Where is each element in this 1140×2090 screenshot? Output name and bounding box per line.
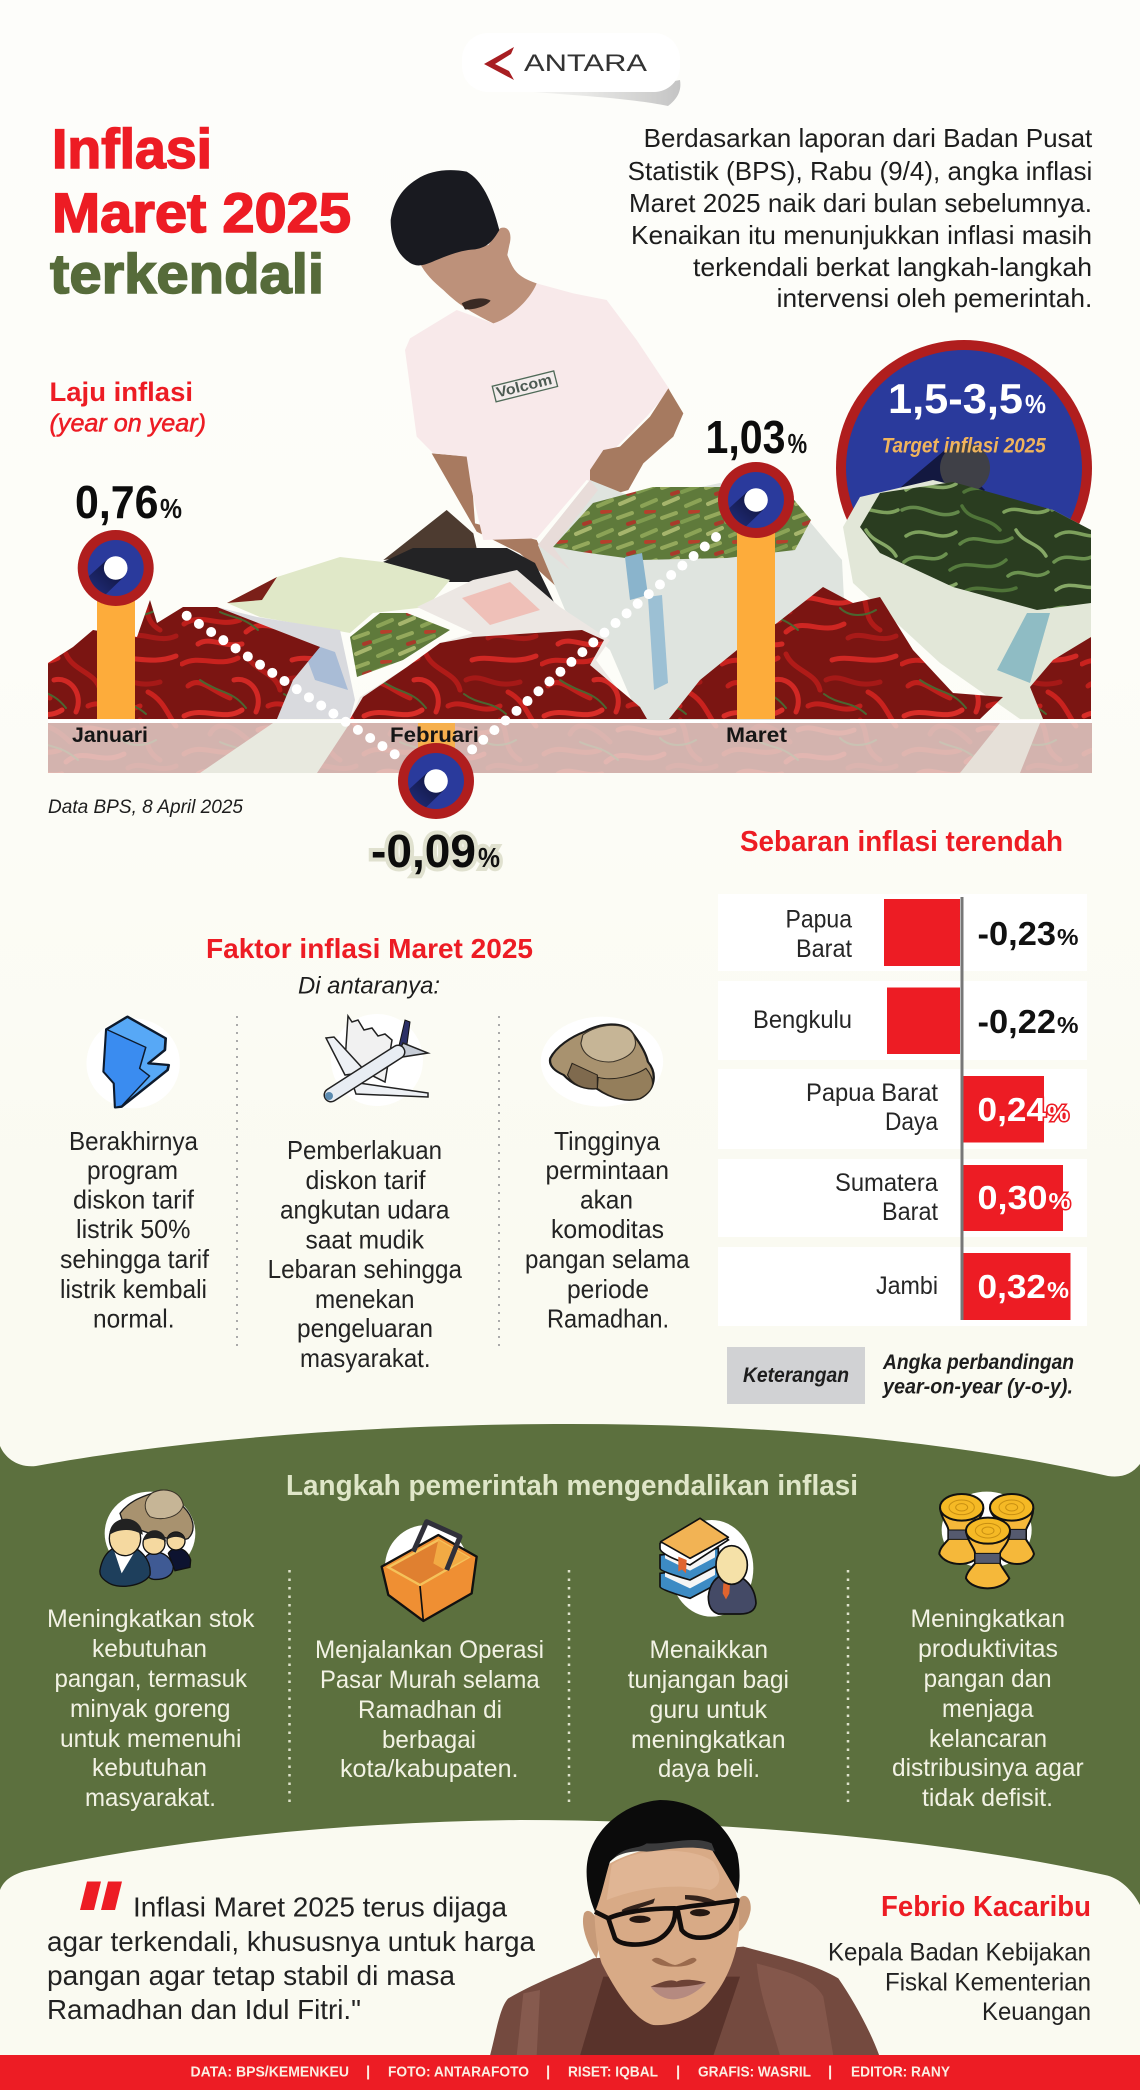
measure text: food stock: pangan, termasuk xyxy=(54,1665,247,1693)
factor text: food demand: Tingginya xyxy=(554,1126,661,1156)
speaker name and role: Kepala Badan Kebijakan xyxy=(828,1939,1091,1967)
factor text: food demand: permintaan xyxy=(546,1155,669,1185)
footer credits: | xyxy=(366,2064,370,2080)
chart subtitle xyxy=(50,377,206,438)
data source note: Data BPS, 8 April 2025 xyxy=(48,797,243,818)
photo: chili sacks xyxy=(48,480,1092,773)
measure text: food stock: minyak goreng xyxy=(70,1695,230,1723)
measure text: cheap market: Ramadhan di xyxy=(358,1696,502,1724)
month labels xyxy=(72,724,787,747)
stack: left xyxy=(939,1494,1034,1588)
legend: Keterangan xyxy=(743,1364,849,1387)
stack: front xyxy=(966,1532,1010,1588)
value: Februari: % xyxy=(478,842,500,873)
quote text xyxy=(47,1892,535,2025)
middle sack stripes xyxy=(625,553,648,600)
marker: Maret xyxy=(714,462,794,540)
green chilies in right sack xyxy=(860,482,1091,610)
measure text: food stock: kebutuhan xyxy=(92,1635,207,1663)
measure text: food productivity: tidak defisit. xyxy=(922,1784,1053,1812)
row: Bengkulu: % xyxy=(1057,1012,1078,1038)
row: Papua Barat xyxy=(718,894,1087,971)
intro paragraph xyxy=(628,123,1093,313)
row: Papua Barat Daya: Papua Barat xyxy=(806,1079,938,1107)
logo: ANTARA xyxy=(462,33,680,106)
row: Papua Barat Daya xyxy=(718,1069,1087,1149)
faded strip xyxy=(48,720,1092,773)
factor text: air fares: pengeluaran xyxy=(297,1313,433,1343)
factor text: electricity: diskon tarif xyxy=(73,1185,195,1215)
title: Inflasi xyxy=(52,117,212,180)
target inflation badge: % xyxy=(1025,389,1046,419)
right sack xyxy=(843,480,1091,719)
factor text: air fares: Pemberlakuan xyxy=(287,1135,442,1165)
measure text: food stock: kebutuhan xyxy=(92,1754,207,1782)
factor text: air fares: saat mudik xyxy=(306,1225,425,1255)
dotted trend line xyxy=(187,537,716,758)
heading: faktor inflasi: Faktor inflasi Maret 2025 xyxy=(206,933,533,964)
factor text: electricity: Berakhirnya xyxy=(69,1126,199,1156)
measure text: food productivity: menjaga xyxy=(942,1695,1034,1723)
marker: Januari xyxy=(74,530,154,608)
panel: government measures xyxy=(0,1424,1140,1905)
target inflation badge: 1,5-3,5 xyxy=(888,375,1023,422)
row: Papua Barat: -0,23 xyxy=(978,915,1056,952)
measure text: cheap market xyxy=(315,1636,544,1783)
hair xyxy=(587,1800,740,1912)
seller left arm xyxy=(432,453,560,590)
intro paragraph: Maret 2025 naik dari bulan sebelumnya. xyxy=(629,188,1092,218)
value: Januari: % xyxy=(160,493,182,524)
chart subtitle: Laju inflasi xyxy=(50,377,193,407)
intro paragraph: Statistik (BPS), Rabu (9/4), angka inflasi xyxy=(628,156,1092,186)
speaker name and role: Fiskal Kementerian xyxy=(885,1968,1091,1996)
icon: airplane and receipt xyxy=(325,1014,428,1106)
footer credits xyxy=(0,2055,1140,2090)
measure text: teacher allowance: daya beli. xyxy=(658,1755,760,1783)
factor text: electricity: listrik kembali xyxy=(60,1274,207,1304)
factor text: food demand: komoditas xyxy=(551,1214,664,1244)
right sack stripe xyxy=(997,613,1050,683)
factor text: food demand: akan xyxy=(580,1185,633,1215)
basket xyxy=(383,548,565,640)
nose xyxy=(652,1958,697,1967)
red chilies: centre pile xyxy=(669,587,1003,719)
row: Papua Barat Daya: Daya xyxy=(885,1108,938,1136)
eyes xyxy=(629,1916,651,1923)
heading: sebaran: Sebaran inflasi terendah xyxy=(740,826,1063,858)
factor text: electricity: listrik 50% xyxy=(76,1214,190,1244)
seller trousers xyxy=(383,510,477,560)
chart subtitle: (year on year) xyxy=(50,410,206,438)
measure text: cheap market: Menjalankan Operasi xyxy=(315,1636,544,1664)
measure text: teacher allowance: guru untuk xyxy=(650,1696,767,1724)
factor text: air fares: menekan xyxy=(315,1284,414,1314)
seller shirt xyxy=(405,283,670,540)
factor text: air fares: masyarakat. xyxy=(300,1343,430,1373)
red chilies: right pile xyxy=(1030,637,1091,719)
factor text: air fares: Lebaran sehingga xyxy=(268,1254,462,1284)
measure text: cheap market: berbagai xyxy=(382,1726,476,1754)
photo: market seller xyxy=(383,170,683,590)
measure text: food productivity: produktivitas xyxy=(918,1635,1058,1663)
middle sack xyxy=(538,480,850,720)
measure text: cheap market: kota/kabupaten. xyxy=(340,1755,518,1783)
row: Bengkulu: -0,22 xyxy=(978,1003,1056,1040)
seller neck and face xyxy=(420,228,537,323)
marker: Februari xyxy=(394,743,474,821)
footer credits: FOTO: ANTARAFOTO xyxy=(388,2064,529,2080)
row: Sumatera Barat: Sumatera xyxy=(835,1169,938,1197)
lips xyxy=(651,1980,706,1999)
intro paragraph: terkendali berkat langkah-langkah xyxy=(693,252,1092,282)
portrait: Febrio Kacaribu xyxy=(490,1800,879,2056)
bar: Maret xyxy=(737,530,775,719)
pale green sack xyxy=(227,557,450,633)
panel: lowest inflation bars xyxy=(718,894,1087,1326)
bar: Januari xyxy=(97,600,135,719)
ears xyxy=(583,1911,602,1958)
row: Bengkulu xyxy=(718,981,1087,1060)
quote mark xyxy=(80,1882,122,1910)
factor text: electricity xyxy=(60,1126,210,1334)
quote text: Ramadhan dan Idul Fitri." xyxy=(47,1994,361,2025)
footer credits: | xyxy=(676,2064,680,2080)
row: Sumatera Barat xyxy=(718,1159,1087,1237)
value: Maret: % xyxy=(788,428,807,459)
title xyxy=(50,117,351,305)
brows xyxy=(622,1898,655,1913)
glasses xyxy=(595,1900,737,1945)
legend: year-on-year (y-o-y). xyxy=(882,1376,1073,1399)
factor text: food demand xyxy=(525,1126,690,1334)
row: Sumatera Barat: 0,30 xyxy=(978,1179,1048,1216)
footer credits: | xyxy=(828,2064,832,2080)
title: Maret 2025 xyxy=(52,181,351,244)
factor text: food demand: Ramadhan. xyxy=(547,1304,669,1334)
icon: food sack xyxy=(541,1017,663,1107)
row: Jambi: 0,32 xyxy=(978,1268,1046,1305)
intro paragraph: Berdasarkan laporan dari Badan Pusat xyxy=(644,123,1093,153)
speaker name and role: Febrio Kacaribu xyxy=(881,1891,1091,1923)
green chilies in middle sack xyxy=(553,487,811,560)
measure text: teacher allowance: tunjangan bagi xyxy=(628,1666,789,1694)
stack: right xyxy=(990,1508,1034,1564)
measure text: teacher allowance: Menaikkan xyxy=(650,1636,768,1664)
row: Papua Barat: Papua xyxy=(786,906,852,934)
measure text: food productivity: kelancaran xyxy=(929,1725,1047,1753)
factor text: electricity: sehingga tarif xyxy=(60,1244,210,1274)
factor text: electricity: normal. xyxy=(93,1304,174,1334)
white plastic bag xyxy=(350,570,640,719)
row: Jambi: Jambi xyxy=(876,1272,938,1300)
footer credits: | xyxy=(546,2064,550,2080)
quote text: pangan agar tetap stabil di masa xyxy=(47,1960,455,1991)
measure text: food stock: Meningkatkan stok xyxy=(47,1605,255,1633)
factor text: air fares: angkutan udara xyxy=(280,1195,450,1225)
face xyxy=(595,1845,739,2025)
footer credits: EDITOR: RANY xyxy=(851,2064,950,2080)
factor text: air fares xyxy=(268,1135,462,1373)
small green chilies xyxy=(350,613,450,677)
factor text: electricity: program xyxy=(87,1155,178,1185)
footer credits: RISET: IQBAL xyxy=(568,2064,658,2080)
icon: gold coin stacks xyxy=(939,1492,1034,1588)
measure text: teacher allowance: meningkatkan xyxy=(631,1726,786,1754)
measure text: cheap market: Pasar Murah selama xyxy=(320,1666,540,1694)
speaker name and role: Keuangan xyxy=(982,1998,1091,2026)
bar: Februari xyxy=(418,723,455,753)
red chilies: February pile xyxy=(350,630,647,719)
factor text: food demand: periode xyxy=(567,1274,649,1304)
icon: electricity bolt xyxy=(86,1017,180,1108)
title: terkendali xyxy=(50,242,324,305)
row: Papua Barat Daya: % xyxy=(1047,1100,1069,1126)
intro paragraph: Kenaikan itu menunjukkan inflasi masih xyxy=(631,220,1092,250)
icon: people and sack xyxy=(100,1490,195,1586)
measure text: teacher allowance xyxy=(628,1636,789,1783)
row: Papua Barat Daya: 0,24 xyxy=(978,1091,1047,1128)
month labels: Februari xyxy=(390,724,479,747)
row: Bengkulu: Bengkulu xyxy=(753,1006,852,1034)
target inflation badge xyxy=(836,340,1092,596)
row: Jambi: % xyxy=(1047,1277,1069,1303)
icon: books and teacher xyxy=(660,1518,756,1617)
measure text: food productivity xyxy=(892,1605,1084,1812)
measure text: food stock: masyarakat. xyxy=(85,1784,216,1812)
row: Papua Barat: % xyxy=(1057,924,1078,950)
legend: Angka perbandingan xyxy=(882,1351,1074,1374)
quote text: Inflasi Maret 2025 terus dijaga xyxy=(133,1892,507,1923)
measure text: food productivity: distribusinya agar xyxy=(892,1754,1084,1782)
factor text: air fares: diskon tarif xyxy=(306,1165,426,1195)
target inflation badge: Target inflasi 2025 xyxy=(882,435,1046,458)
row: Sumatera Barat: % xyxy=(1048,1188,1070,1214)
row: Papua Barat: Barat xyxy=(796,935,852,963)
measure text: food stock: untuk memenuhi xyxy=(60,1725,242,1753)
jacket xyxy=(490,1947,879,2056)
heading: langkah pemerintah: Langkah pemerintah mengendalikan inflasi xyxy=(286,1470,858,1502)
logo: ANTARA: ANTARA xyxy=(524,50,647,77)
striped cloth sack xyxy=(217,607,355,719)
footer credits: GRAFIS: WASRIL xyxy=(698,2064,811,2080)
quote text: agar terkendali, khususnya untuk harga xyxy=(47,1926,535,1957)
month labels: Maret xyxy=(726,724,787,747)
value: Maret: 1,03 xyxy=(706,411,786,463)
legend xyxy=(727,1347,1074,1404)
sack rim xyxy=(538,480,598,570)
measure text: food stock xyxy=(47,1605,255,1812)
measure text: food productivity: pangan dan xyxy=(924,1665,1052,1693)
row: Jambi xyxy=(718,1247,1087,1326)
speaker name and role xyxy=(828,1891,1091,2026)
red chilies: January pile xyxy=(48,600,320,719)
heading: faktor inflasi: Di antaranya: xyxy=(298,973,440,1000)
seller right arm xyxy=(590,388,683,498)
row: Sumatera Barat: Barat xyxy=(882,1198,938,1226)
heading: faktor inflasi xyxy=(206,933,533,1000)
seller hair xyxy=(391,170,499,265)
month labels: Januari xyxy=(72,724,148,747)
value: Februari: -0,09 xyxy=(371,825,476,877)
shirt logo: Volcom xyxy=(495,372,554,401)
footer credits: DATA: BPS/KEMENKEU xyxy=(190,2064,349,2080)
intro paragraph: intervensi oleh pemerintah. xyxy=(777,283,1092,313)
factor text: food demand: pangan selama xyxy=(525,1244,690,1274)
icon: market basket xyxy=(382,1522,477,1621)
measure text: food productivity: Meningkatkan xyxy=(910,1605,1065,1633)
value: Januari: 0,76 xyxy=(75,476,158,528)
